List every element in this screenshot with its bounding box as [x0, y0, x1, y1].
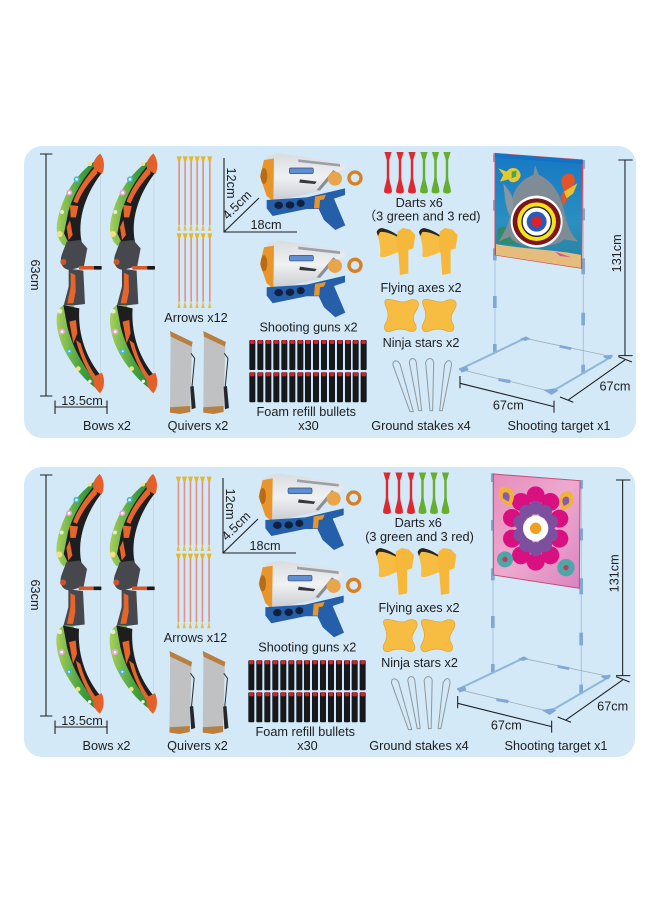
label: foam refill bullets: Foam refill bullets	[256, 725, 355, 739]
panel: bottom set with flower target	[24, 467, 635, 757]
label: ground stakes: Ground stakes x4	[369, 739, 469, 753]
dimensions: gun size: 18cm	[249, 539, 281, 553]
shark	[498, 165, 578, 246]
icon: darts	[384, 152, 451, 194]
icon: ground stakes	[391, 677, 450, 730]
icon: two bows	[56, 474, 157, 714]
panel background	[24, 146, 636, 438]
dimensions: gun size: 12cm	[223, 488, 237, 520]
shooting target: flower	[457, 473, 630, 733]
label: shooting target: Shooting target x1	[505, 739, 607, 753]
icon: arrows	[177, 156, 212, 308]
dimensions and labels: 131cm	[610, 234, 624, 272]
frame	[457, 473, 611, 715]
label: darts: Darts x6	[395, 516, 442, 530]
label: foam refill bullets: Foam refill bullets	[257, 405, 356, 419]
dimension: bow height 63cm: 63cm	[28, 259, 42, 291]
dimensions and labels: 131cm	[608, 554, 622, 592]
icon: shooting guns	[259, 473, 360, 637]
label: shooting guns: Shooting guns x2	[259, 320, 358, 334]
label: shooting guns: Shooting guns x2	[258, 640, 356, 654]
icon: ground stakes	[393, 359, 451, 412]
icon: two bows	[57, 153, 157, 393]
panel background	[24, 467, 635, 757]
dimensions: gun size	[220, 158, 297, 232]
icon: foam bullets	[248, 660, 366, 722]
label: bows: Bows x2	[83, 419, 131, 433]
dimensions and labels: 67cm	[597, 700, 628, 714]
label: shooting target: Shooting target x1	[508, 419, 610, 433]
dimension: bow height 63cm	[28, 154, 52, 396]
dimensions: gun size	[219, 478, 296, 553]
label: flying axes: Flying axes x2	[378, 601, 460, 615]
dimensions: gun size: 12cm	[224, 167, 238, 199]
dimension: bow height 63cm	[28, 475, 52, 716]
banner	[493, 474, 580, 588]
label: foam refill bullets: x30	[297, 739, 318, 753]
label: quivers: Quivers x2	[167, 739, 228, 753]
icon: ninja stars	[383, 619, 455, 652]
label: arrows: Arrows x12	[164, 631, 227, 645]
label: foam refill bullets: x30	[298, 419, 319, 433]
icon: ninja stars	[384, 299, 456, 332]
label: bows: Bows x2	[83, 739, 130, 753]
icon: darts	[383, 472, 449, 514]
banner	[495, 153, 583, 268]
dimensions and labels	[458, 480, 630, 733]
icon: flying axes	[377, 228, 458, 275]
shooting target: shark	[459, 153, 633, 413]
label: quivers: Quivers x2	[168, 419, 228, 433]
dimensions and labels: 67cm	[600, 380, 630, 394]
dimension: bow width 13.5cm: 13.5cm	[61, 714, 103, 728]
dimensions and labels: 67cm	[491, 718, 522, 732]
dimensions: gun size: 18cm	[250, 218, 282, 232]
icon: arrows	[176, 477, 212, 628]
dimensions: gun size: 4.5cm	[219, 509, 253, 543]
label: ninja stars: Ninja stars x2	[381, 656, 458, 670]
label: darts: （3 green and 3 red)	[363, 210, 481, 224]
dimension: bow width 13.5cm	[55, 714, 107, 734]
label: ninja stars: Ninja stars x2	[383, 336, 459, 350]
panel: top set with shark target	[24, 146, 636, 438]
label: flying axes: Flying axes x2	[380, 281, 462, 295]
icon: foam bullets	[249, 340, 367, 402]
dimension: bow height 63cm: 63cm	[28, 579, 42, 611]
dimensions and labels	[460, 160, 633, 413]
dimensions and labels: 67cm	[493, 398, 524, 412]
dimension: bow width 13.5cm	[55, 394, 107, 414]
label: darts: Darts x6	[396, 196, 443, 210]
dimension: bow width 13.5cm: 13.5cm	[61, 394, 103, 408]
icon: shooting guns	[260, 153, 361, 317]
icon: quivers	[170, 331, 229, 414]
icon: quivers	[169, 651, 228, 734]
fish	[498, 168, 521, 182]
label: arrows: Arrows x12	[164, 311, 228, 325]
dimensions: gun size: 4.5cm	[220, 188, 254, 222]
label: ground stakes: Ground stakes x4	[371, 419, 471, 433]
label: darts: (3 green and 3 red)	[365, 530, 474, 544]
frame	[459, 153, 613, 395]
icon: flying axes	[375, 548, 456, 595]
